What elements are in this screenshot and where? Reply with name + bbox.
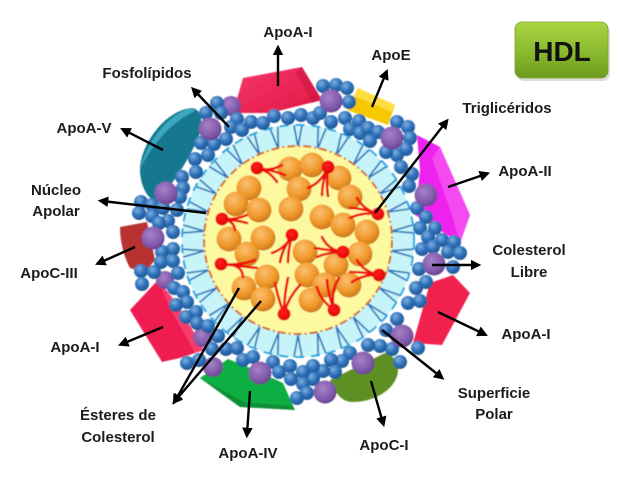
phospholipid tails: [182, 125, 414, 357]
label: ApoA-II: ApoA-II: [498, 163, 552, 180]
label: ApoE: ApoE: [371, 47, 411, 64]
triglycerides (red heads and tails): [214, 160, 386, 320]
badge: HDL: HDL: [533, 36, 591, 67]
label: ApoA-V: ApoA-V: [56, 120, 112, 137]
HDL particle: [120, 67, 470, 410]
free cholesterol behind phospholipids: [156, 96, 241, 377]
label: ApoA-IV: ApoA-IV: [218, 445, 278, 462]
label: ApoA-I right: ApoA-I: [501, 326, 551, 343]
cholesteryl esters (orange spheres): [216, 152, 380, 312]
arrows: [99, 49, 486, 434]
free cholesterol (purple spheres): [142, 90, 446, 404]
protein: ApoA-I left: [130, 280, 204, 362]
label: Ésteres de Colesterol: Ésteres de: [80, 407, 156, 424]
badge: HDL: [515, 22, 610, 81]
label: ApoC-I: ApoC-I: [359, 437, 409, 454]
protein: ApoA-I right: [413, 275, 470, 345]
protein: ApoA-I top: [233, 67, 322, 113]
label: Colesterol Libre: Colesterol: [492, 242, 566, 259]
label: ApoA-I top: ApoA-I: [263, 24, 313, 41]
label: Núcleo Apolar: Núcleo: [31, 182, 81, 199]
label: Ésteres de Colesterol: Colesterol: [81, 429, 155, 446]
label: Superficie Polar: Polar: [475, 406, 513, 423]
label: Triglicéridos: Triglicéridos: [462, 100, 552, 117]
protein: ApoA-IV: [200, 359, 295, 410]
label: Núcleo Apolar: Apolar: [32, 203, 80, 220]
phospholipid heads (blue spheres): [132, 78, 467, 405]
label: ApoC-III: ApoC-III: [20, 265, 78, 282]
label: ApoA-I left: ApoA-I: [50, 339, 100, 356]
label: Fosfolípidos: Fosfolípidos: [102, 65, 192, 82]
core: [204, 146, 392, 334]
label: Superficie Polar: Superficie: [458, 385, 530, 402]
protein: ApoC-I: [330, 352, 398, 402]
protein: ApoC-III: [120, 222, 155, 272]
label: Colesterol Libre: Libre: [511, 264, 547, 281]
protein: ApoA-II: [415, 135, 470, 243]
protein: ApoA-V: [140, 108, 201, 200]
labels: [20, 24, 566, 462]
protein: ApoE: [347, 88, 395, 125]
phospholipid ring: [182, 125, 414, 357]
